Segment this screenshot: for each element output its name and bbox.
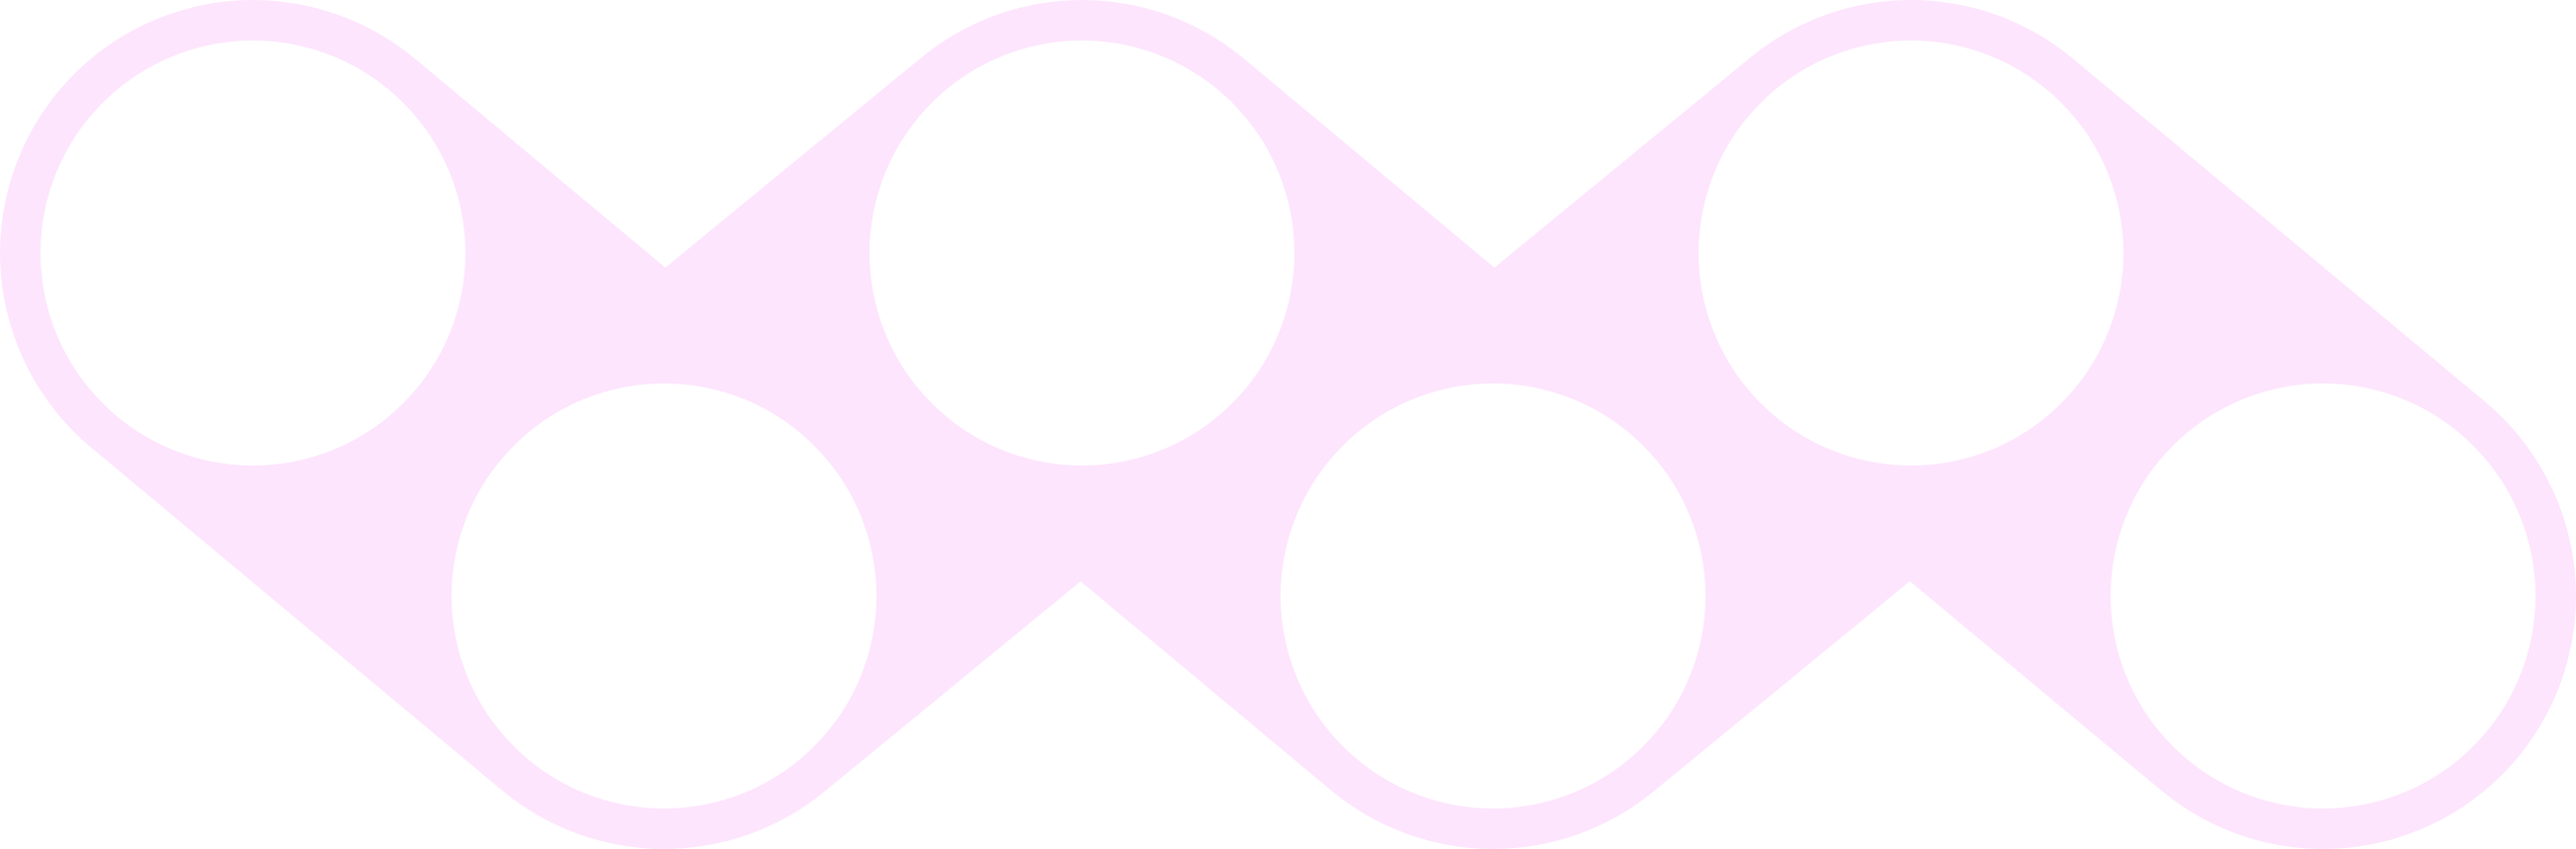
pink zigzag band [253, 253, 2323, 596]
